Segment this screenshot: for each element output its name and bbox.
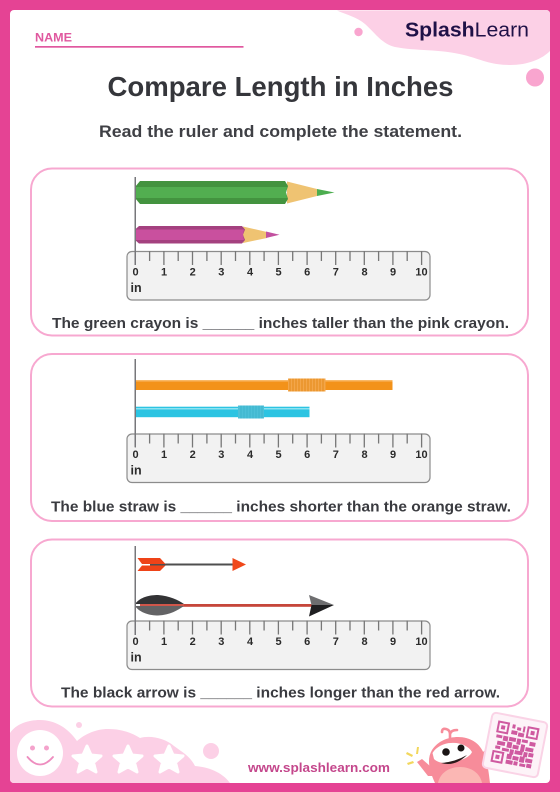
panel: arrows bbox=[31, 540, 528, 706]
ruler: panel 3: 6 bbox=[304, 636, 310, 648]
ruler: panel 1: 0 bbox=[132, 267, 139, 279]
ruler: panel 3: in bbox=[130, 650, 142, 664]
panel: straws bbox=[31, 354, 528, 521]
ruler: panel 2: 1 bbox=[161, 449, 167, 461]
top right decorative blob bbox=[337, 10, 550, 65]
ruler: panel 1: 6 bbox=[304, 267, 310, 279]
green crayon bbox=[135, 181, 334, 204]
ruler: panel 1: 7 bbox=[333, 267, 339, 279]
statement 2: The blue straw is ______ inches shorter than the orange straw. bbox=[51, 500, 511, 516]
pink crayon bbox=[135, 226, 280, 244]
name field: NAME bbox=[35, 30, 72, 44]
ruler: panel 2: 5 bbox=[275, 449, 282, 461]
small dot bbox=[354, 28, 363, 36]
ruler: panel 1: in bbox=[130, 281, 142, 295]
ruler: panel 3: 7 bbox=[333, 636, 339, 648]
blue straw bbox=[135, 406, 310, 418]
ruler: panel 1: 5 bbox=[275, 267, 282, 279]
logo: SplashLearn: SplashLearn bbox=[405, 18, 529, 42]
ruler: panel 2: in bbox=[130, 464, 142, 478]
ruler: panel 2: 0 bbox=[132, 449, 139, 461]
ruler: panel 3: 3 bbox=[218, 636, 224, 648]
large dot bbox=[526, 68, 544, 86]
title: Compare Length in Inches bbox=[108, 71, 454, 102]
icon: sparkles bbox=[406, 747, 419, 765]
ruler: panel 3: 1 bbox=[161, 636, 167, 648]
red arrow bbox=[138, 558, 246, 571]
ruler: panel 1 bbox=[127, 251, 430, 300]
ruler: panel 1: 10 bbox=[415, 267, 428, 279]
ruler: panel 1: 9 bbox=[390, 267, 396, 279]
ruler: panel 1: 1 bbox=[161, 267, 167, 279]
ruler: panel 2: 6 bbox=[304, 449, 310, 461]
panel: crayons bbox=[31, 168, 528, 336]
qr code card bbox=[482, 712, 548, 778]
statement 3: The black arrow is ______ inches longer than the red arrow. bbox=[61, 686, 500, 702]
ruler: panel 2: 4 bbox=[247, 449, 254, 461]
statement 1: The green crayon is ______ inches taller than the pink crayon. bbox=[52, 316, 509, 332]
ruler: panel 1: 8 bbox=[361, 267, 368, 279]
ruler: panel 2: 8 bbox=[361, 449, 368, 461]
ruler: panel 3: 0 bbox=[132, 636, 139, 648]
ruler: panel 3 bbox=[127, 620, 430, 670]
icon: stars bbox=[73, 746, 183, 772]
icon: smiley bbox=[17, 730, 63, 776]
small dot bbox=[76, 722, 82, 728]
ruler: panel 1: 2 bbox=[190, 267, 196, 279]
ruler: panel 3: 5 bbox=[275, 636, 282, 648]
ruler: panel 2: 2 bbox=[190, 449, 196, 461]
ruler: panel 2: 9 bbox=[390, 449, 396, 461]
zero line bbox=[134, 359, 136, 447]
ruler: panel 3: 2 bbox=[190, 636, 196, 648]
ruler: panel 2: 3 bbox=[218, 449, 224, 461]
instruction: Read the ruler and complete the statement. bbox=[99, 122, 462, 141]
ruler: panel 3: 8 bbox=[361, 636, 368, 648]
ruler: panel 2 bbox=[127, 434, 430, 482]
ruler: panel 1: 4 bbox=[247, 267, 254, 279]
orange straw bbox=[135, 378, 392, 392]
ruler: panel 3: 10 bbox=[415, 636, 428, 648]
ruler: panel 3: 4 bbox=[247, 636, 254, 648]
zero line bbox=[134, 546, 136, 635]
dot bbox=[203, 743, 219, 759]
black arrow bbox=[135, 595, 334, 616]
ruler: panel 1: 3 bbox=[218, 267, 224, 279]
ruler: panel 2: 10 bbox=[415, 449, 428, 461]
ruler: panel 2: 7 bbox=[333, 449, 339, 461]
zero line bbox=[134, 177, 136, 265]
ruler: panel 3: 9 bbox=[390, 636, 396, 648]
icon: monster mascot bbox=[417, 729, 494, 783]
website url: www.splashlearn.com bbox=[247, 761, 390, 775]
bottom left decorative blob bbox=[10, 720, 230, 783]
